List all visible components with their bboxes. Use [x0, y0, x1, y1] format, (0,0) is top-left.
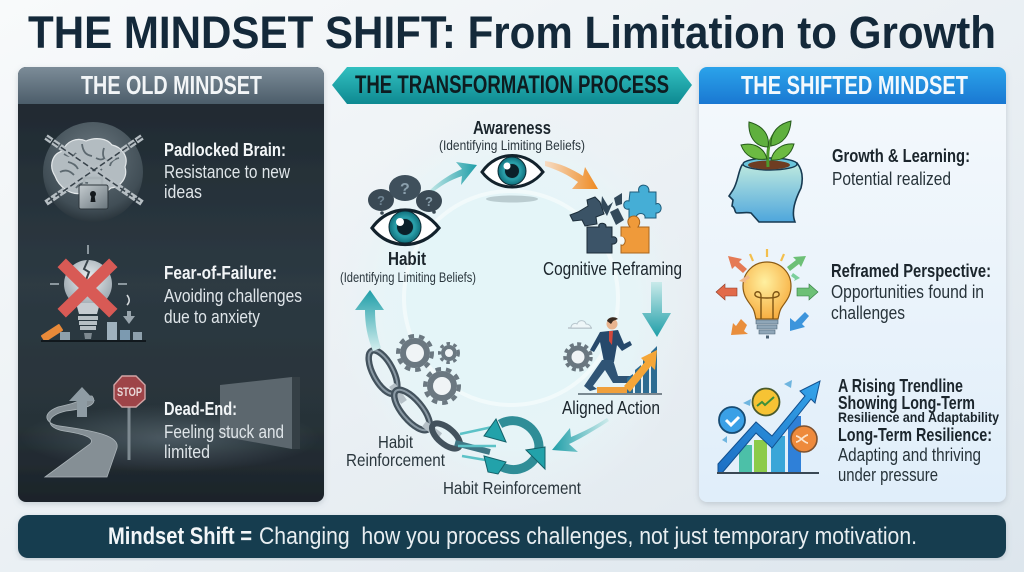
icon: winding road and stop sign: STOP: [117, 387, 142, 399]
step: awareness label: Awareness: [473, 118, 551, 138]
icon: clouds with question marks: ?: [400, 181, 410, 198]
icon: clouds with question marks: ?: [377, 193, 385, 208]
text: fear of failure: due to anxiety: [164, 307, 260, 327]
step: awareness label: (Identifying Limiting Beliefs): [439, 137, 585, 153]
arrow: awareness to reframing: [545, 161, 598, 189]
text: dead-end: Dead-End:: [164, 399, 237, 419]
text: long-term resilience: A Rising Trendline: [838, 376, 963, 396]
text: reframed perspective: Opportunities found in: [831, 282, 984, 302]
icon: aligned action figure: [565, 317, 662, 394]
text: growth and learning: [832, 146, 970, 189]
arrow: reframing to action: [642, 282, 671, 337]
arrow: action to reinforcement: [552, 418, 609, 452]
text: fear of failure: [164, 263, 302, 327]
icon: rising trendline chart: [717, 380, 820, 473]
text: long-term resilience: Resilience and Adaptability: [838, 409, 999, 425]
icon: lightbulb with arrows: [716, 249, 818, 337]
panel: transformation process: [330, 67, 694, 512]
step: aligned action label: Aligned Action: [562, 398, 660, 418]
icon: chain: [363, 346, 490, 453]
banner: transformation process: [332, 67, 692, 104]
panel: the shifted mindset: [699, 67, 1006, 502]
text: reframed perspective: [831, 261, 991, 323]
text: padlocked brain: [164, 140, 291, 202]
text: dead-end: [164, 399, 284, 462]
text: growth and learning: Potential realized: [832, 169, 951, 189]
arrow: habit to awareness: [430, 162, 477, 193]
shifted mindset header: [699, 67, 1006, 104]
text: fear of failure: Avoiding challenges: [164, 286, 302, 306]
step: awareness label: [439, 118, 585, 153]
text: padlocked brain: Resistance to new: [164, 162, 291, 182]
text: long-term resilience: [838, 376, 999, 485]
text: reframed perspective: challenges: [831, 303, 905, 323]
step: habit label and eye: (Identifying Limiting Beliefs): [340, 270, 476, 285]
icon: habit eye: [372, 210, 439, 244]
step: habit reinforcement left label: [346, 432, 445, 470]
icon: clouds with question marks: [368, 175, 442, 215]
footer callout bar: Changing how you process challenges, not just temporary motivation.: [259, 523, 917, 550]
text: long-term resilience: Adapting and thriving: [838, 445, 981, 465]
arrow: reinforcement to habit: [355, 290, 384, 351]
text: dead-end: Feeling stuck and: [164, 422, 284, 442]
text: dead-end: limited: [164, 442, 210, 462]
text: growth and learning: Growth & Learning:: [832, 146, 970, 166]
text: long-term resilience: Showing Long-Term: [838, 393, 975, 413]
step: habit reinforcement left label: Habit: [378, 432, 413, 452]
icon: circular reinforcement arrows: [458, 419, 545, 474]
footer callout bar: [18, 515, 1006, 558]
icon: fear of failure bulb: [41, 245, 146, 342]
step: habit reinforcement bottom label: Habit Reinforcement: [443, 478, 581, 498]
text: fear of failure: Fear-of-Failure:: [164, 263, 277, 283]
icon: winding road and stop sign: [20, 376, 320, 477]
old mindset header: THE OLD MINDSET: [81, 70, 262, 100]
step: habit label and eye: [340, 175, 476, 285]
icon: gears: [398, 336, 459, 403]
old mindset header: [18, 67, 324, 104]
icon: puzzle pieces: [570, 185, 661, 253]
text: long-term resilience: under pressure: [838, 465, 938, 485]
icon: awareness eye: [482, 156, 543, 202]
step: habit label and eye: Habit: [388, 249, 426, 269]
icon: plant growing from head: [729, 121, 802, 222]
icon: padlocked brain: [43, 122, 143, 222]
banner: transformation process: THE TRANSFORMATION PROCESS: [355, 71, 669, 99]
text: padlocked brain: Padlocked Brain:: [164, 140, 286, 160]
text: reframed perspective: Reframed Perspective:: [831, 261, 991, 281]
text: padlocked brain: ideas: [164, 182, 202, 202]
icon: clouds with question marks: ?: [425, 194, 433, 209]
faint central ring: [404, 191, 618, 405]
step: cognitive reframing label: Cognitive Reframing: [543, 258, 682, 279]
footer callout bar: Mindset Shift =: [108, 523, 252, 550]
step: habit reinforcement left label: Reinforcement: [346, 450, 445, 470]
panel: the old mindset: [18, 67, 324, 502]
